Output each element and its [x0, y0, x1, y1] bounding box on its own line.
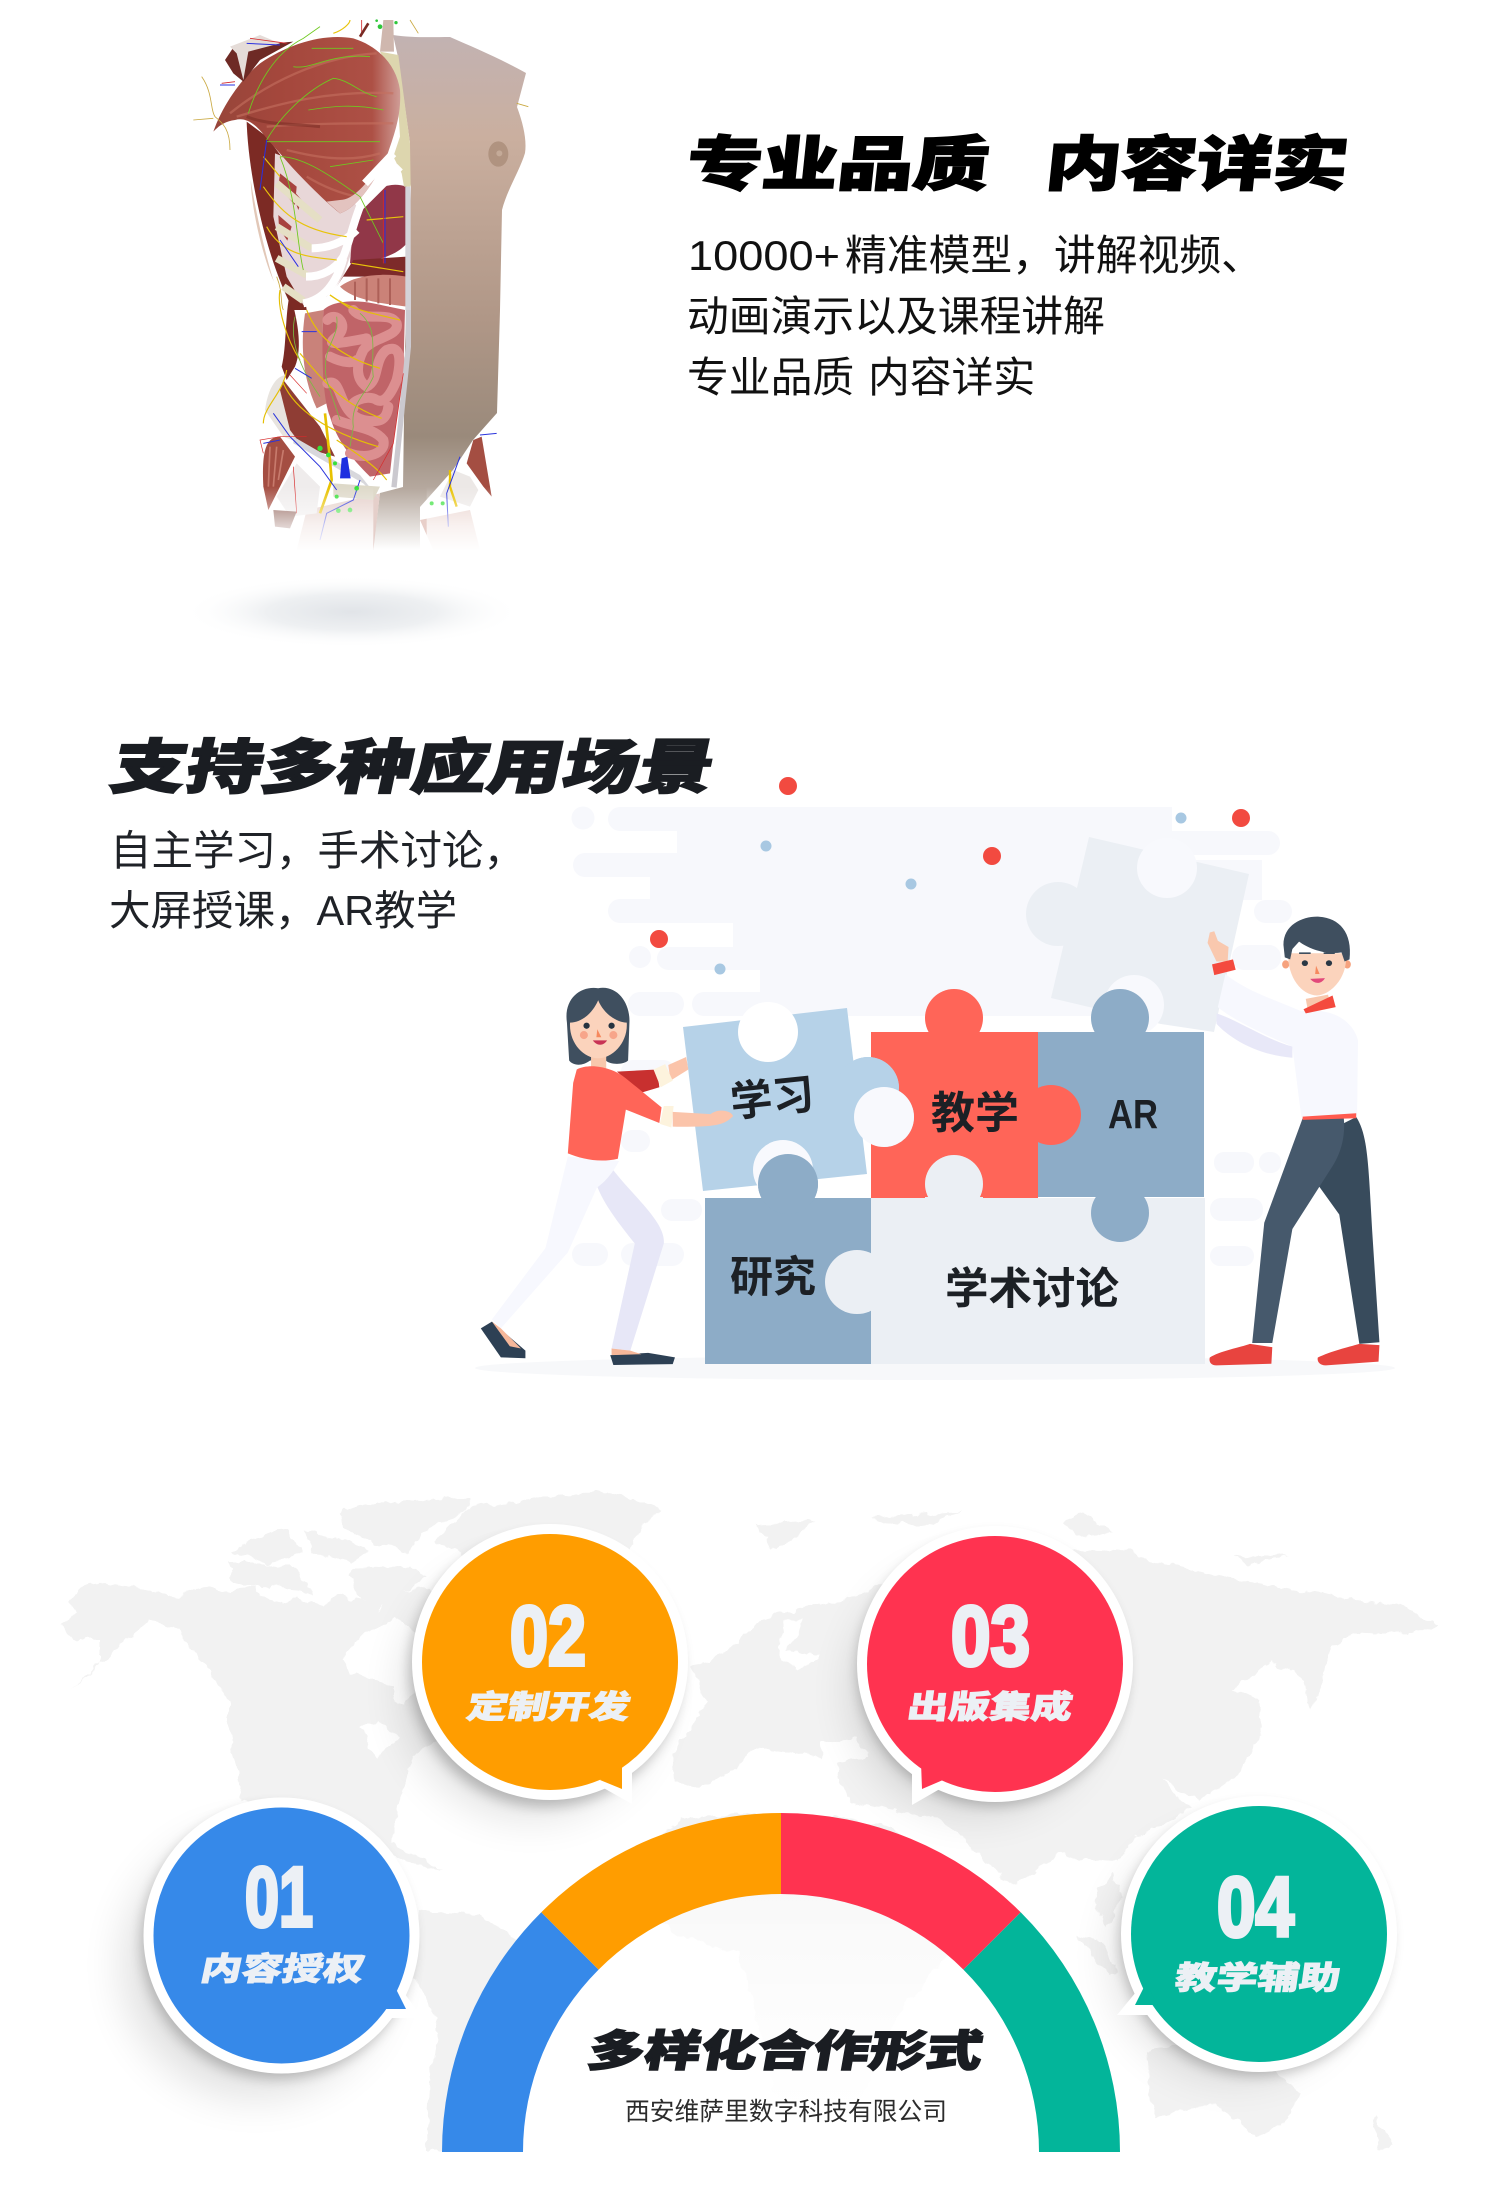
number 02: 02 — [510, 1589, 586, 1683]
number 04: 04 — [1217, 1860, 1294, 1954]
puzzle piece: AR — [1038, 989, 1204, 1242]
heading: 支持多种应用场景: 支持多种应用场景 — [105, 735, 721, 801]
body copy: 10000+ — [688, 232, 840, 279]
bubble 03: publishing integration — [857, 1526, 1133, 1805]
background: world map — [61, 1493, 1439, 2150]
label 出版集成: 出版集成 — [905, 1689, 1075, 1725]
label: 学术讨论: 学术讨论 — [945, 1266, 1119, 1314]
puzzle piece: 学习 — [683, 1002, 899, 1214]
decorative dots — [650, 777, 1250, 974]
label: 学习: 学习 — [728, 1070, 816, 1126]
bubble 02: custom development — [412, 1524, 688, 1804]
label: AR: AR — [1108, 1091, 1158, 1137]
label 教学辅助: 教学辅助 — [1173, 1960, 1343, 1996]
panel: anatomy model — [182, 19, 528, 648]
arc segment: green — [963, 1912, 1120, 2152]
arc segment: orange — [541, 1813, 781, 1970]
bubble 01: content licensing — [144, 1798, 423, 2074]
inner disc — [523, 1894, 1039, 2152]
bubble shadows — [125, 1533, 1392, 2095]
semicircle chart — [442, 1813, 1120, 2152]
section: application scenarios text — [105, 735, 721, 934]
chest and shoulder — [193, 19, 528, 310]
body copy — [687, 232, 1263, 401]
puzzle piece: floating grey — [1026, 837, 1249, 1035]
description copy — [109, 827, 525, 934]
arc segment: red — [781, 1813, 1021, 1970]
company name: 西安维萨里数字科技有限公司 — [625, 2098, 947, 2126]
number 03: 03 — [951, 1589, 1030, 1683]
description copy: 自主学习，手术讨论， — [110, 827, 525, 874]
heading: 专业品质 内容详实: 内容详实 — [1043, 131, 1352, 198]
body copy: 精准模型，讲解视频、 — [845, 232, 1263, 279]
heading: 专业品质 内容详实 — [684, 131, 1352, 198]
section: professional quality heading and copy — [684, 131, 1352, 401]
label 内容授权: 内容授权 — [198, 1951, 368, 1987]
body copy: 专业品质 — [687, 354, 854, 401]
description copy: 大屏授课，AR教学 — [109, 887, 457, 934]
puzzle piece: 教学 — [837, 989, 1081, 1213]
puzzle piece: 研究 — [705, 1154, 871, 1364]
section: cooperation forms — [125, 1524, 1397, 2152]
number 01: 01 — [245, 1850, 313, 1944]
body copy: 内容详实 — [868, 354, 1035, 401]
man figure — [1208, 917, 1379, 1365]
chart title: 多样化合作形式 — [584, 2028, 987, 2076]
arc segment: blue — [442, 1912, 599, 2152]
woman figure — [481, 988, 733, 1365]
label: 教学: 教学 — [931, 1089, 1019, 1138]
heading: 专业品质 内容详实: 专业品质 — [684, 131, 993, 198]
bubble 04: teaching assistance — [1117, 1796, 1397, 2072]
body copy: 动画演示以及课程讲解 — [687, 293, 1105, 340]
ground shadow — [475, 1356, 1395, 1380]
label 定制开发: 定制开发 — [464, 1689, 634, 1725]
model floor shadow — [182, 576, 522, 648]
skin surface — [373, 35, 526, 550]
lower abdomen and pelvis — [253, 280, 507, 552]
illustration: puzzle scene — [475, 777, 1395, 1380]
anatomical torso illustration — [193, 19, 528, 552]
label: 研究: 研究 — [730, 1254, 816, 1302]
puzzle piece: 学术讨论 — [825, 1198, 1205, 1364]
